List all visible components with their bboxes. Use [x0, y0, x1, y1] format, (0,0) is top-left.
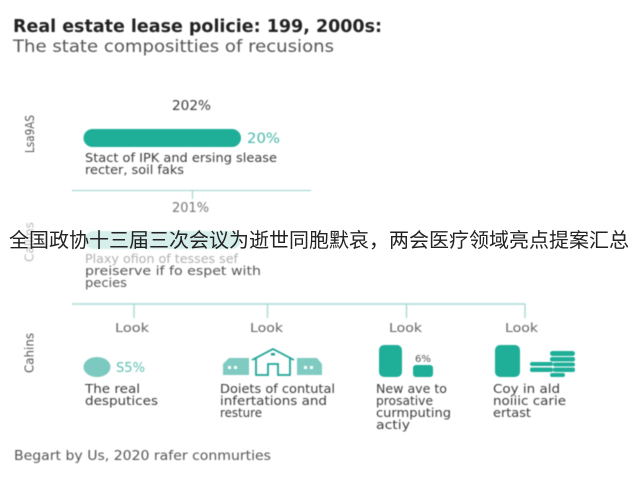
- description: The real: [84, 382, 140, 396]
- description: New ave to: [376, 382, 447, 396]
- description: infertations and: [220, 394, 327, 408]
- description: ertast: [493, 406, 531, 420]
- column heading: Look: [250, 321, 283, 335]
- side label: middle: Callins: [22, 222, 36, 262]
- description: [85, 151, 277, 177]
- description: [84, 382, 158, 408]
- description: Plaxy ofion of tesses sef: [85, 252, 239, 266]
- icon: coin stacks: [495, 345, 575, 377]
- title: Real estate lease policie: 199, 2000s:: [13, 17, 382, 37]
- description: actiy: [376, 418, 410, 432]
- section: top bar: [22, 99, 280, 177]
- column heading: Look: [115, 321, 149, 335]
- description: pecies: [85, 276, 127, 290]
- bar value: 20%: [247, 131, 280, 147]
- subtitle: The state compositties of recusions: [12, 37, 334, 56]
- description: desputices: [85, 394, 158, 408]
- column 4: [493, 321, 575, 420]
- progress bar: [84, 129, 241, 147]
- column heading: Look: [505, 321, 538, 335]
- column 1: [84, 321, 158, 408]
- description: [376, 382, 451, 432]
- description: Doiets of contutal: [220, 382, 335, 396]
- side label: bottom: Cahins: [22, 333, 36, 373]
- value: 6%: [415, 354, 431, 365]
- icon: houses: [223, 349, 322, 375]
- description: preiserve if fo espet with: [85, 264, 261, 278]
- section: middle bar: [22, 201, 261, 290]
- side label: top: Lsa9AS: [22, 115, 37, 153]
- column heading: Look: [389, 321, 422, 335]
- description: [85, 252, 261, 290]
- description: noiiic carie: [493, 394, 566, 408]
- description: [493, 382, 566, 420]
- description: [220, 382, 335, 420]
- connector tree: [72, 304, 526, 318]
- description: resture: [220, 406, 262, 420]
- description: prosative: [376, 394, 433, 408]
- description: Coy in ald: [493, 382, 560, 396]
- column 2: [220, 321, 335, 420]
- caption overlay: 全国政协十三届三次会议为逝世同胞默哀，两会医疗领域亮点提案汇总: [9, 230, 629, 252]
- description: curmputing: [376, 406, 451, 420]
- year label: 202%: 202%: [172, 99, 211, 114]
- pale bar: [85, 231, 241, 249]
- description: Stact of IPK and ersing slease: [85, 151, 277, 165]
- icon: cylinders: [379, 345, 433, 377]
- column 3: [376, 321, 451, 432]
- icon: circle: [84, 357, 110, 377]
- value: S5%: [116, 361, 145, 376]
- description: recter, soil faks: [85, 163, 184, 177]
- year label: 201%: 201%: [172, 201, 209, 216]
- footer source: Begart by Us, 2020 rafer conmurties: [14, 448, 271, 464]
